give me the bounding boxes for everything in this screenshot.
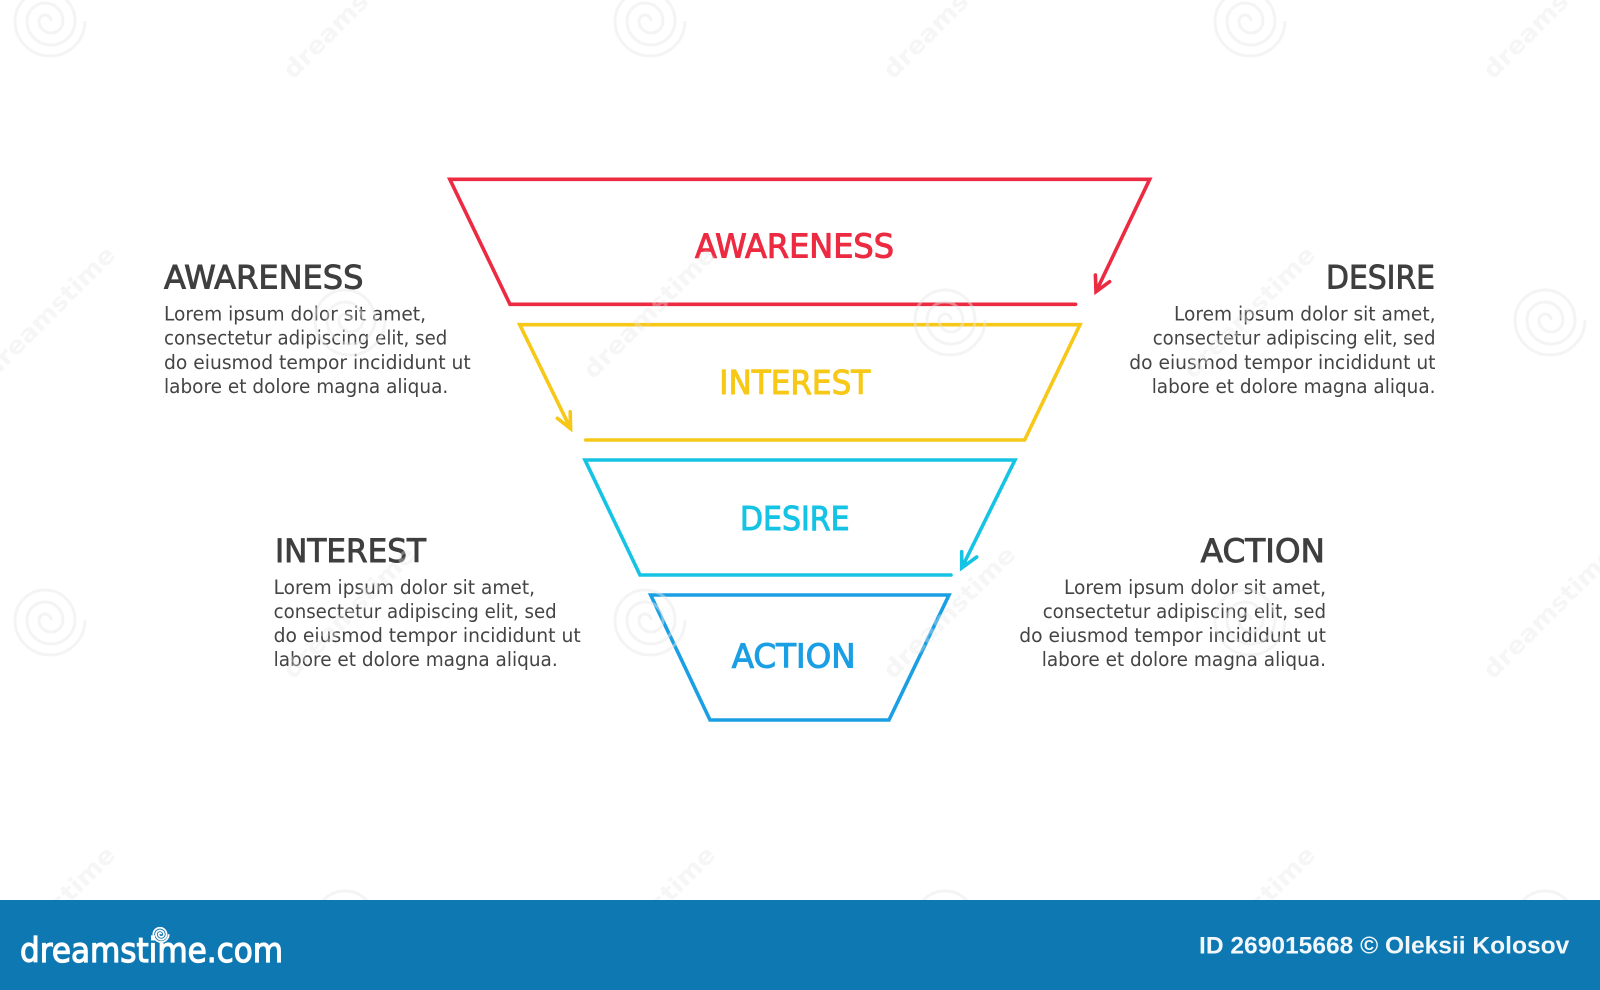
text block: interest: Lorem ipsum dolor sit amet, [274,576,535,599]
text block: awareness: consectetur adipiscing elit, sed [164,326,447,350]
text block: interest [274,532,581,671]
funnel segment: interest: INTEREST [719,364,870,402]
watermark pattern: dreamstime [577,241,721,384]
watermark pattern: dreamstime [1177,841,1321,984]
funnel segment: awareness: AWARENESS [695,228,894,266]
watermark pattern: dreamstime [577,841,721,984]
text block: action: do eiusmod tempor incididunt ut [1019,624,1326,647]
text block: interest: do eiusmod tempor incididunt ut [274,624,581,647]
watermark pattern: dreamstime [877,541,1021,684]
icon: logo spiral [153,928,169,942]
text block: awareness: labore et dolore magna aliqua. [164,375,448,398]
footer banner [0,900,1600,990]
logo wordmark: dreamstime.com [20,931,283,971]
text block: interest: consectetur adipiscing elit, sed [274,600,557,623]
watermark pattern: dreamstime [277,541,421,684]
text block: desire: labore et dolore magna aliqua. [1152,375,1436,398]
text block: awareness: AWARENESS [164,258,364,296]
text block: desire: Lorem ipsum dolor sit amet, [1174,302,1436,325]
text block: action: consectetur adipiscing elit, sed [1043,600,1326,623]
funnel segment: awareness [450,179,1150,304]
funnel segment: action: ACTION [732,638,856,676]
text block: interest: labore et dolore magna aliqua. [274,648,558,671]
text block: desire [1129,258,1436,398]
funnel diagram [450,179,1150,720]
funnel segment: interest [520,325,1080,440]
watermark pattern: dreamstime [1177,241,1321,384]
text block: desire: DESIRE [1326,258,1435,296]
funnel segment: desire [585,460,1015,575]
text block: action: ACTION [1201,532,1325,570]
text block: awareness: Lorem ipsum dolor sit amet, [164,302,426,325]
text block: interest: INTEREST [275,532,426,570]
text block: action [1019,532,1326,671]
text block: action: Lorem ipsum dolor sit amet, [1064,576,1326,599]
funnel segment: desire: DESIRE [740,500,850,538]
text block: action: labore et dolore magna aliqua. [1042,648,1326,671]
text block: awareness [164,258,471,398]
text block: desire: consectetur adipiscing elit, sed [1153,326,1436,350]
image credit: ID 269015668 © Oleksii Kolosov [1199,932,1570,959]
text block: awareness: do eiusmod tempor incididunt ut [164,351,471,374]
text block: desire: do eiusmod tempor incididunt ut [1129,351,1436,374]
funnel segment: action [651,595,949,720]
